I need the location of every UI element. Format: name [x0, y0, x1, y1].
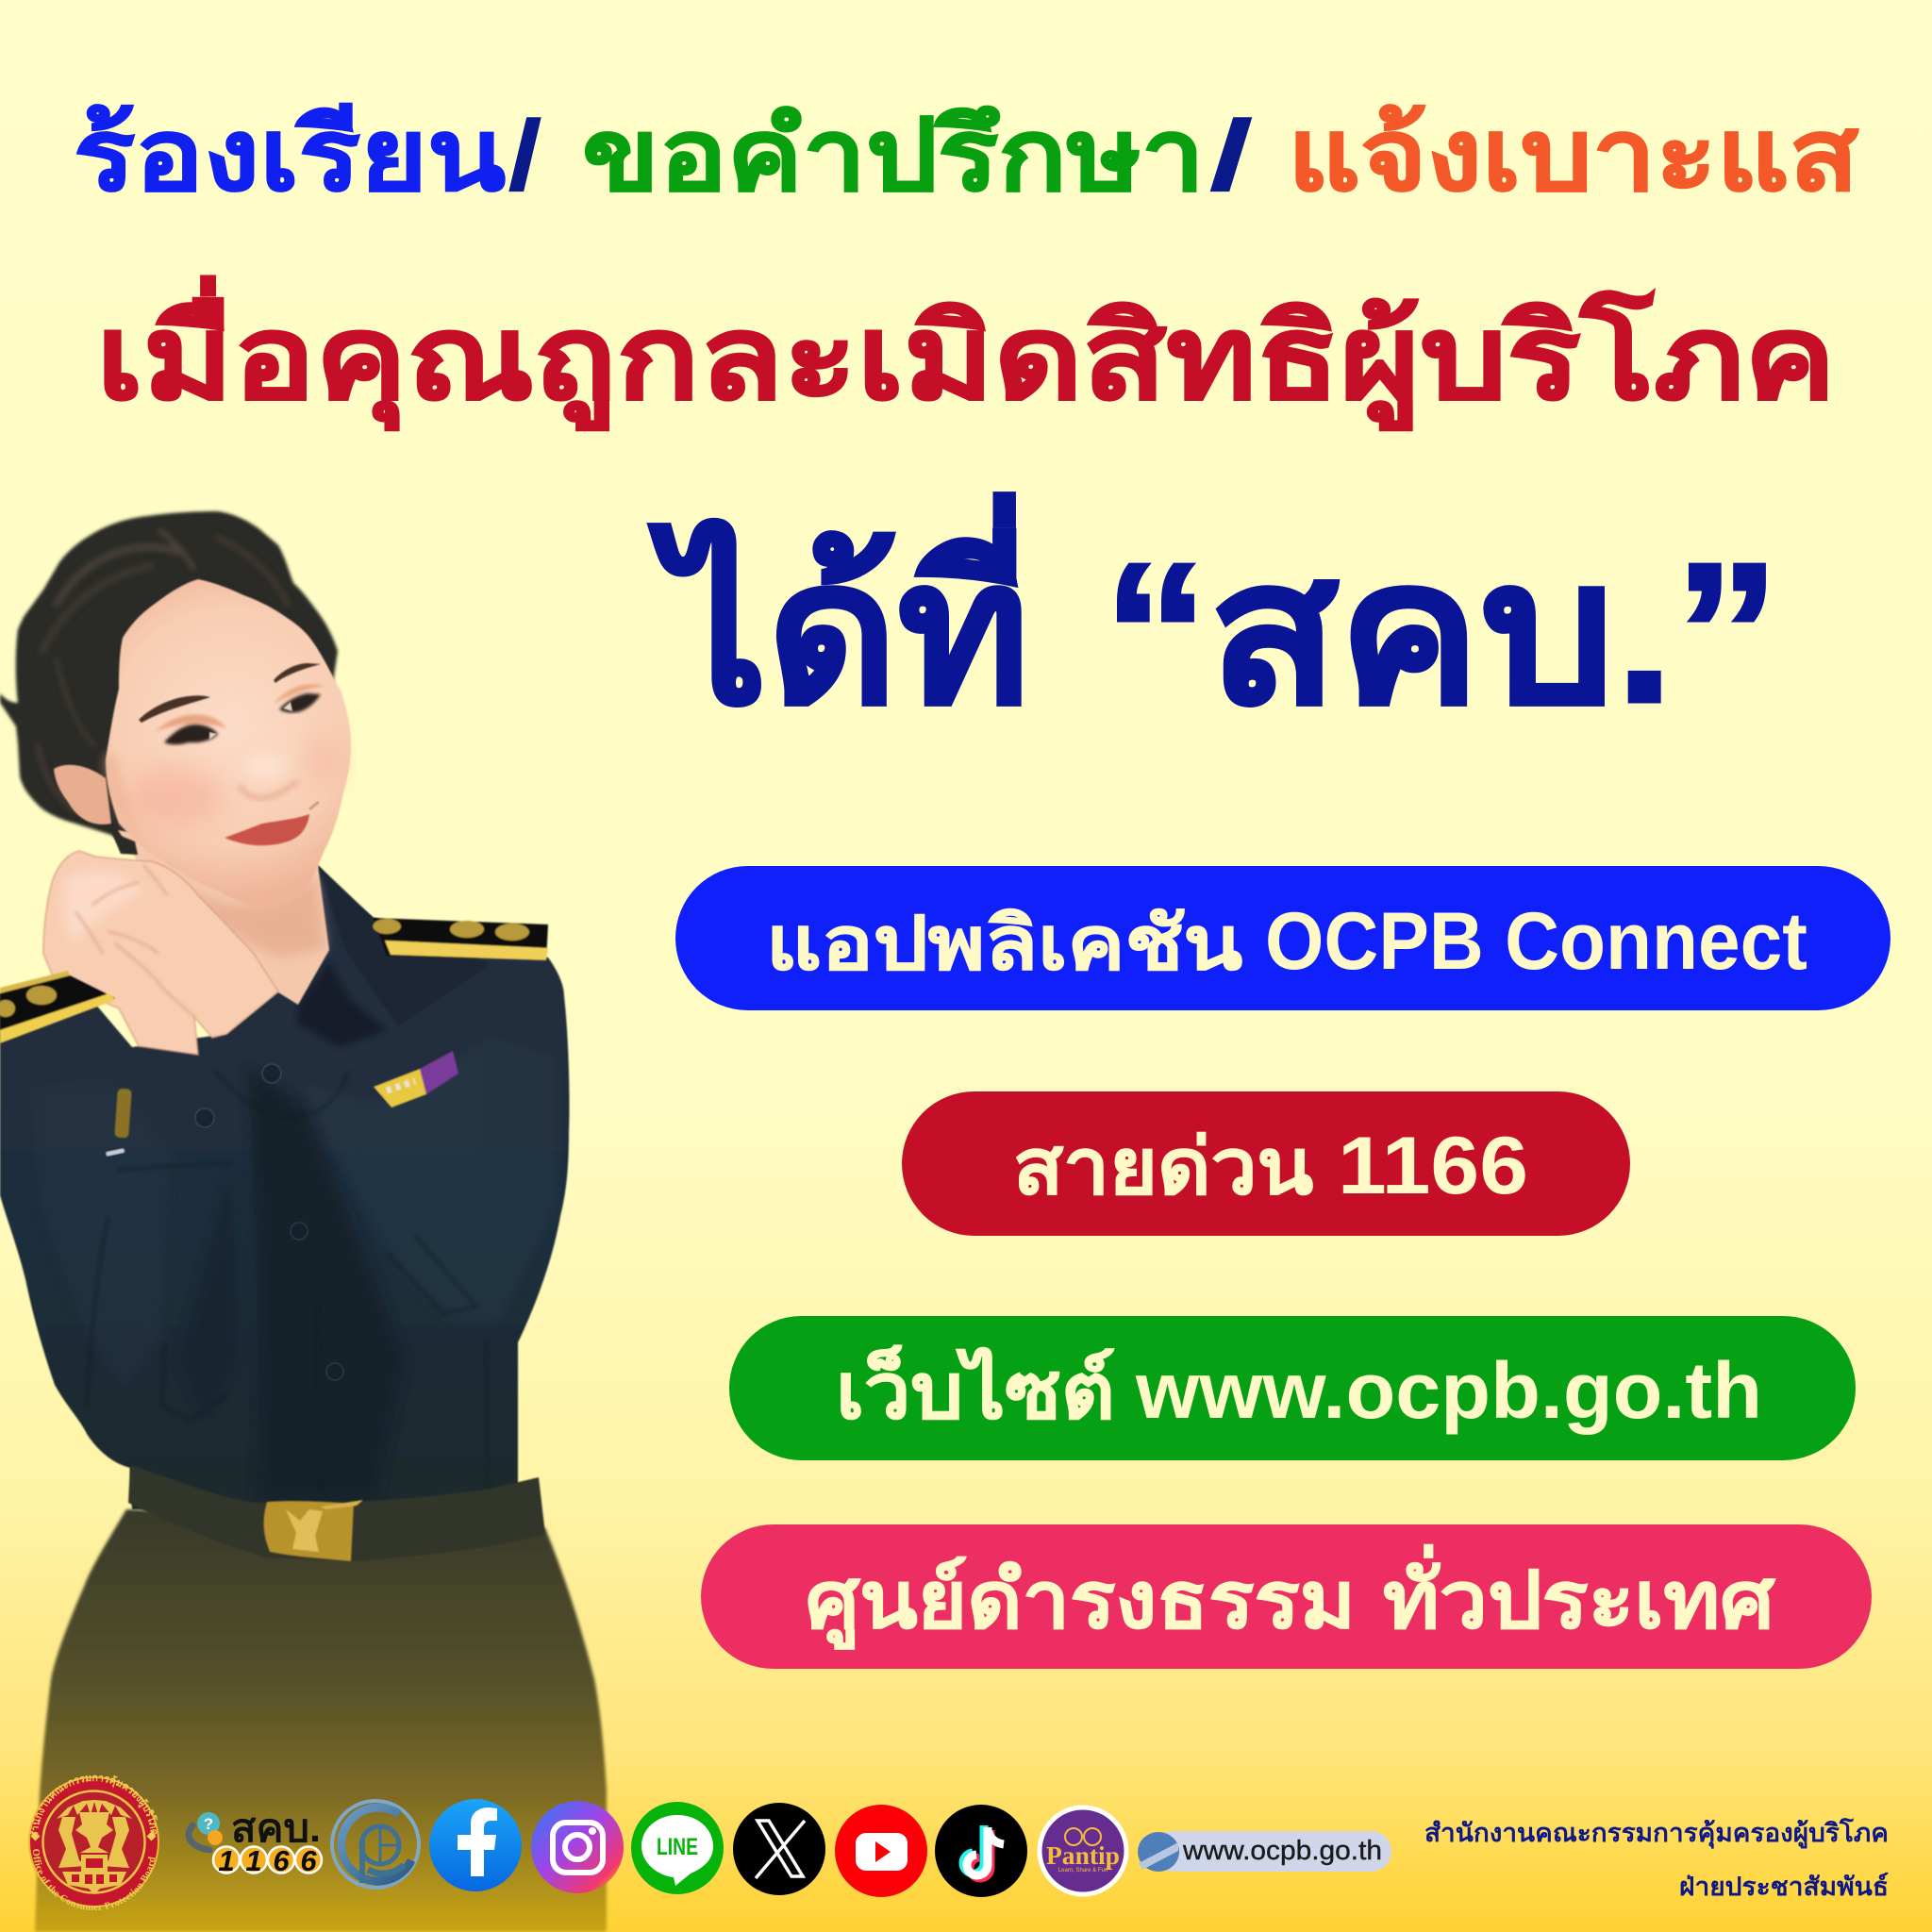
bun strand: [38, 745, 75, 811]
panel lines: [72, 1874, 117, 1884]
disc: [835, 1805, 927, 1897]
black strap: [0, 974, 115, 1043]
left sleeve highlight: [28, 1075, 170, 1387]
consult: ขอคำปรึกษา: [582, 100, 1205, 211]
light dots: [387, 1081, 415, 1091]
digit 1: 1: [218, 1844, 235, 1877]
1166 badges: [213, 1847, 322, 1874]
icon: Facebook: [429, 1799, 522, 1891]
E bars: [380, 1828, 398, 1862]
button: OCPB Connect app: [675, 866, 1890, 1010]
hair highlights: [38, 530, 288, 811]
emblem: [57, 1800, 132, 1894]
hand highlights: [63, 871, 142, 943]
ray row: [57, 1800, 132, 1819]
white note: [967, 1827, 1004, 1875]
label latin: www.ocpb.go.th: [1135, 1346, 1762, 1435]
at: ได้ที่: [648, 492, 1030, 744]
slash: /: [1208, 100, 1254, 211]
nose shadow: [240, 781, 298, 798]
left eye: [164, 724, 218, 744]
inner V neck: [297, 962, 387, 1047]
face: [106, 579, 351, 908]
belt: [128, 1465, 545, 1561]
pip edge: [0, 1000, 15, 1017]
black strap: [374, 918, 548, 960]
finger lines: [75, 865, 194, 1017]
palm crease: [115, 943, 162, 988]
emblem red accents: [72, 1858, 117, 1884]
disc: [733, 1803, 825, 1895]
knuckle: [108, 931, 158, 954]
disc: [531, 1801, 624, 1893]
centre placket shadow: [247, 1066, 406, 1500]
word: LINE: [657, 1834, 698, 1860]
hair back and bun: [0, 511, 338, 854]
left cheek blush: [125, 767, 224, 827]
urn: [75, 1812, 113, 1853]
jaw shading: [106, 755, 139, 840]
right guardian lion: [101, 1817, 129, 1868]
chest pin white: [106, 1148, 125, 1157]
wordmark: สคบ.: [231, 1807, 321, 1850]
left guardian lion: [58, 1817, 87, 1868]
clasped hands: [43, 851, 278, 1055]
left eyebrow: [139, 695, 210, 723]
logo: OCPB royal seal: [28, 1775, 159, 1911]
waist fold: [318, 1302, 321, 1491]
right eyeshadow: [274, 684, 325, 704]
question bubble: [197, 1812, 220, 1835]
illustration: smiling officer in uniform: [0, 511, 607, 1932]
white rounded rectangle: [856, 1833, 908, 1871]
gold inner ring: [43, 1790, 145, 1892]
right sleeve cuff: [389, 1236, 476, 1313]
strand: [57, 547, 179, 604]
ear: [54, 765, 111, 824]
cuff seam: [215, 1071, 349, 1117]
waist fold right: [486, 1340, 488, 1486]
strand: [42, 566, 151, 651]
phone icon: [189, 1825, 209, 1850]
buckle tip: [321, 1500, 363, 1509]
side strand: [57, 660, 94, 745]
answer bubble: [208, 1830, 223, 1845]
base window: [86, 1858, 103, 1868]
OCPB in quotes: “สคบ.”: [1103, 521, 1780, 744]
title line 2: when your consumer rights are violated: เมื่อคุณถูกละเมิดสิทธิผู้บริโภค: [96, 275, 1836, 431]
top crease: [143, 865, 167, 895]
left lens: [1065, 1828, 1082, 1845]
buckle plate: [264, 1501, 354, 1561]
service ribbon bar: [374, 1051, 458, 1108]
right eye sclera: [283, 702, 292, 711]
left placket: [118, 1162, 231, 1170]
label thai: แอปพลิเคชัน: [766, 902, 1242, 985]
waist button lower: [326, 1363, 343, 1380]
left eyeshadow: [156, 714, 226, 731]
slash: /: [508, 100, 542, 211]
pip middle: [450, 921, 484, 938]
shirt button: [195, 1108, 214, 1127]
gold band top: [0, 971, 70, 993]
digit 1: 1: [245, 1844, 262, 1877]
wordmark: Pantip: [1046, 1841, 1120, 1870]
button: hotline 1166: [902, 1091, 1630, 1236]
smile crease: [309, 802, 319, 809]
parting: [160, 530, 193, 568]
right eye: [279, 693, 321, 712]
right eyebrow: [274, 663, 321, 683]
disc: [935, 1805, 1027, 1897]
P stem: [359, 1840, 365, 1883]
garuda emblem: [286, 1509, 323, 1552]
disc: [1040, 1807, 1126, 1894]
nape hair: [111, 832, 138, 855]
pill: [1153, 1831, 1391, 1872]
disc: [429, 1799, 522, 1891]
icon: Instagram: [531, 1801, 624, 1893]
P bowl: [361, 1826, 399, 1864]
badge 3: [268, 1847, 294, 1874]
icon: Pantip: [1040, 1807, 1126, 1894]
play triangle: [875, 1841, 891, 1862]
icon: LINE: [631, 1802, 724, 1894]
right lens: [1084, 1828, 1101, 1845]
left diamond: [31, 1832, 40, 1840]
strand: [217, 538, 288, 604]
website badge: [1138, 1831, 1391, 1872]
disc: [631, 1802, 724, 1894]
globe: [1138, 1832, 1179, 1872]
thick C arc: [341, 1807, 411, 1881]
lower panels: [62, 1872, 126, 1894]
lips: [225, 814, 309, 845]
badge 2: [241, 1847, 267, 1874]
pill: [902, 1091, 1630, 1236]
gold band bottom: [0, 993, 115, 1043]
finger: [75, 911, 103, 954]
ring text top: สำนักงานคณะกรรมการคุ้มครองผู้บริโภค: [29, 1775, 158, 1836]
left epaulette: [0, 971, 115, 1043]
collar pin: [114, 1089, 132, 1138]
logo: OCPB 1166: [189, 1807, 322, 1877]
label digits: 1166: [1338, 1121, 1528, 1211]
badge 1: [213, 1847, 240, 1874]
button: website: [729, 1316, 1856, 1460]
1166 digits: [218, 1844, 317, 1877]
finger: [92, 882, 139, 906]
flash: [589, 1827, 596, 1835]
badge 4: [295, 1847, 322, 1874]
tagline: Learn, Share & Fun: [1058, 1868, 1108, 1874]
ring text bottom: Office of the Consumer Protection Board: [33, 1849, 155, 1911]
icon: TikTok: [935, 1805, 1027, 1897]
address: www.ocpb.go.th: [1182, 1836, 1382, 1866]
lens: [565, 1835, 590, 1859]
cuff button: [262, 1064, 281, 1083]
footer: agency name: สำนักงานคณะกรรมการคุ้มครองผู้บริโภค: [1424, 1817, 1889, 1849]
collar: [318, 865, 491, 1026]
button: Damrongtham centres nationwide: [701, 1524, 1872, 1669]
X stroke: [756, 1821, 805, 1878]
digit 6: 6: [273, 1844, 290, 1877]
neck shadow: [142, 854, 325, 958]
logo: OCPB ring: [332, 1801, 419, 1888]
belt buckle: [264, 1500, 363, 1561]
left arm inner shadow: [192, 1209, 232, 1329]
fold lines: [91, 1072, 477, 1405]
label first word: ศูนย์ดำรงธรรม: [806, 1556, 1356, 1650]
shirt shading: [28, 962, 557, 1500]
nose highlight: [245, 751, 287, 781]
digit 6: 6: [300, 1844, 317, 1877]
label latin: OCPB Connect: [1265, 896, 1807, 987]
purple ribbon: [420, 1051, 458, 1094]
title line 1: complain, consult, tip-off: [74, 100, 1858, 211]
right cheek blush: [308, 733, 342, 786]
footer: public relations division: ฝ่ายประชาสัมพันธ์: [1679, 1872, 1889, 1901]
label thai: เว็บไซต์: [836, 1344, 1115, 1435]
pill: [701, 1524, 1872, 1669]
speech bubble: [641, 1815, 713, 1886]
icon: X: [733, 1803, 825, 1895]
question mark: ?: [204, 1815, 213, 1833]
base: [81, 1855, 108, 1872]
label second word: ทั่วประเทศ: [1383, 1544, 1776, 1644]
yellow ribbon: [374, 1069, 426, 1108]
lower C swoosh: [368, 1865, 404, 1874]
skirt: [35, 1509, 607, 1932]
camera outline: [553, 1823, 603, 1873]
globe band: [1139, 1842, 1178, 1870]
right diamond: [147, 1832, 156, 1840]
outer ring: [29, 1777, 158, 1907]
tip-off: แจ้งเบาะแส: [1288, 100, 1858, 211]
f: [458, 1807, 497, 1876]
glasses mark: [1065, 1828, 1101, 1845]
complain: ร้องเรียน: [74, 100, 506, 211]
icon: YouTube: [835, 1805, 927, 1897]
gold band: [385, 941, 548, 960]
cyan note shadow: [963, 1825, 984, 1874]
waist button upper: [291, 1223, 308, 1240]
cuff left: [164, 1404, 165, 1405]
left eye sclera: [209, 732, 217, 740]
left sleeve fold: [91, 1218, 109, 1342]
wrist crease: [162, 988, 194, 1017]
pip: [26, 986, 57, 1005]
red note shadow: [970, 1830, 991, 1878]
neck: [118, 830, 329, 1005]
shirt and arms: [0, 865, 569, 1509]
X mark: [758, 1821, 803, 1876]
pill: [675, 866, 1890, 1010]
label thai: สายด่วน: [1013, 1124, 1313, 1210]
right sleeve highlight: [302, 1038, 557, 1324]
outer ring: [332, 1801, 419, 1888]
pip left: [373, 919, 401, 934]
pip right: [495, 924, 529, 941]
right epaulette: [373, 918, 548, 960]
title line 3: at OCPB: [648, 492, 1780, 744]
pill: [729, 1316, 1856, 1460]
